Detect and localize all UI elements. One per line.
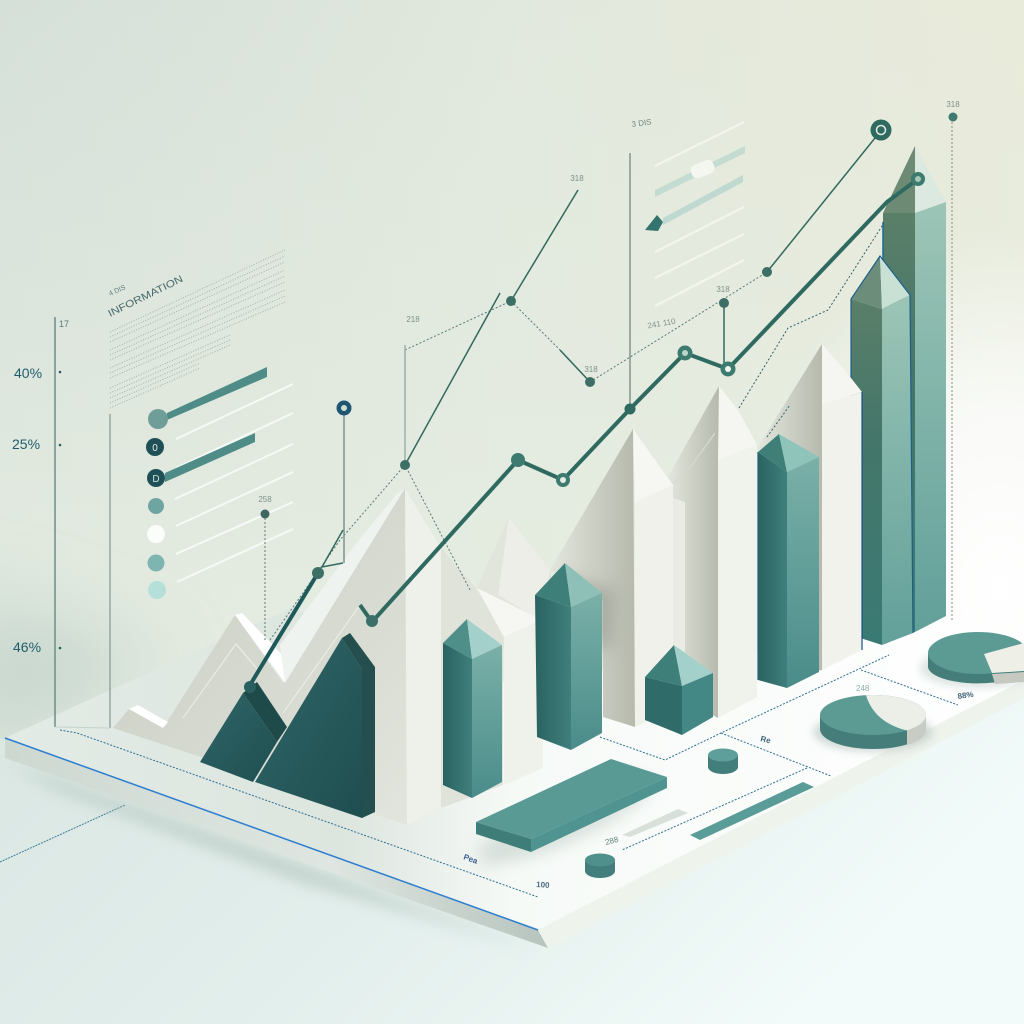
heading: 4 DIS	[108, 284, 127, 298]
pie chart 1	[813, 695, 933, 752]
dotted trend lines	[265, 122, 952, 640]
left axis: 25%	[12, 436, 40, 452]
small chart labels: 318	[570, 174, 584, 183]
platform labels: Re	[760, 734, 772, 746]
teal small house	[645, 645, 713, 735]
long teal bar	[690, 782, 814, 840]
teal slab	[469, 759, 667, 879]
platform dotted guides	[60, 655, 958, 897]
pie chart 2	[920, 632, 1024, 688]
small chart labels: 318	[716, 285, 730, 294]
main trend line	[360, 179, 918, 622]
floor	[0, 680, 1024, 1024]
white strip between bars	[673, 498, 685, 660]
floor dotted guide	[0, 805, 125, 862]
slider panel	[630, 117, 745, 409]
legend panel	[146, 367, 293, 599]
bar 2 cast shadow	[565, 575, 615, 650]
small chart labels: 241 110	[647, 317, 677, 330]
teal bar 3	[757, 434, 819, 688]
left axis: 17	[59, 319, 69, 329]
sage bar 4	[851, 256, 913, 645]
heading: INFORMATION	[106, 274, 185, 320]
white bar W2	[477, 588, 543, 785]
small chart labels: 318	[584, 365, 598, 374]
platform labels	[462, 684, 974, 890]
platform labels: Pea	[462, 852, 479, 866]
tall sage bar 5	[883, 146, 946, 640]
white mountain and tall white bar	[113, 488, 503, 825]
pale line on white bars	[673, 433, 715, 483]
left axis	[12, 317, 110, 728]
body text lines	[110, 250, 285, 408]
legend panel: 0	[152, 443, 158, 454]
legend panel: D	[152, 474, 160, 485]
teal mountains	[200, 633, 375, 818]
small cylinder 2	[585, 854, 615, 878]
small chart labels: 218	[406, 315, 420, 324]
small chart labels: 258	[258, 495, 272, 504]
small chart labels	[258, 100, 960, 504]
white bar W3	[550, 429, 673, 727]
platform labels: 100	[536, 880, 550, 890]
teal bar 1	[443, 619, 502, 798]
grey bar	[622, 809, 688, 837]
white bar W5	[758, 344, 862, 680]
chart nodes	[244, 112, 958, 693]
platform	[5, 607, 1024, 950]
left axis: 40%	[14, 365, 42, 381]
platform labels: 288	[604, 835, 620, 847]
back white mountain	[477, 517, 560, 650]
small cylinder 1	[708, 748, 738, 774]
secondary trend line	[250, 573, 318, 685]
platform labels: 248	[856, 684, 870, 693]
white bar W4	[668, 386, 757, 718]
small chart labels: 318	[946, 100, 960, 109]
teal bar 2	[535, 563, 602, 750]
left axis: 46%	[13, 639, 41, 655]
slider panel: 3 DIS	[631, 117, 652, 129]
thin line chart	[322, 138, 875, 567]
platform labels: 88%	[957, 690, 974, 701]
